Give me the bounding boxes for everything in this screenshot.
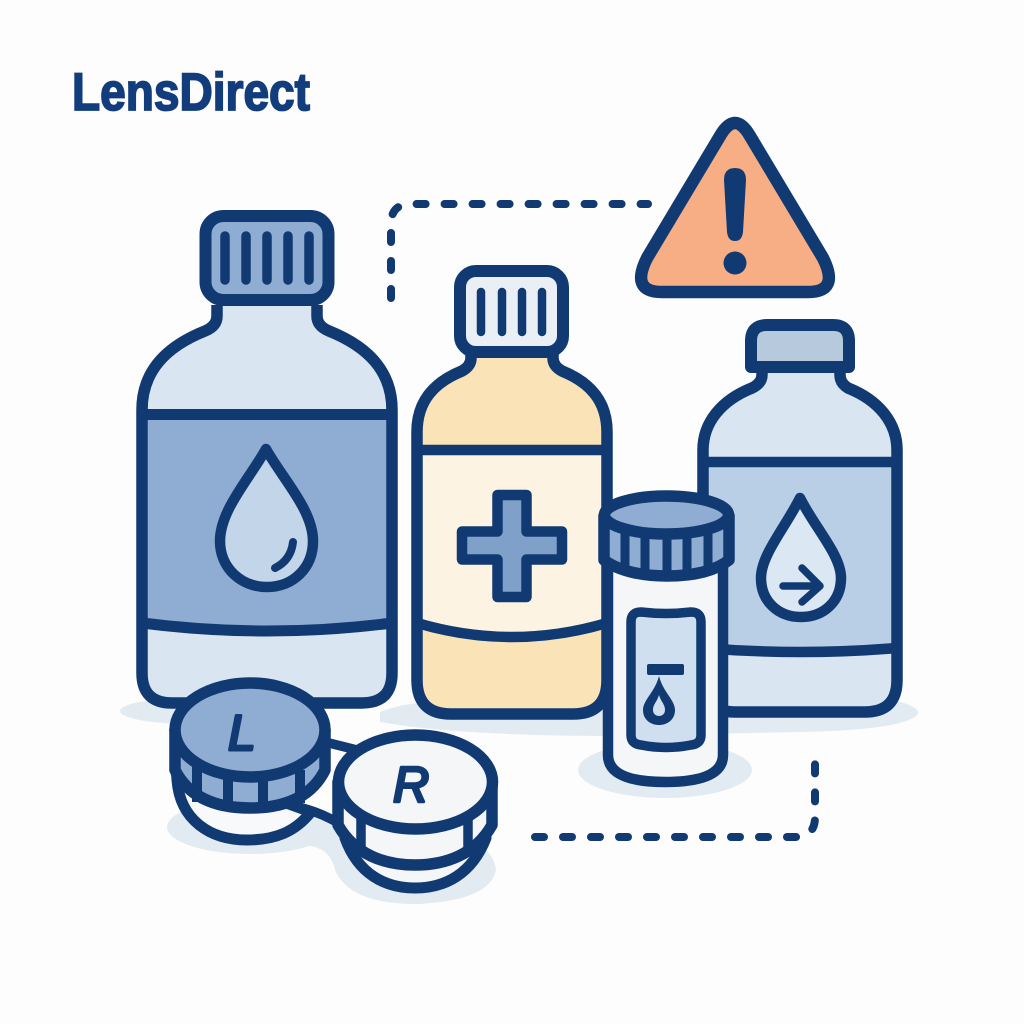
warning triangle icon: [641, 123, 829, 292]
logo: LensDirect: LensDirect: [72, 63, 310, 122]
jar lid: [604, 496, 729, 576]
lens case: [175, 683, 492, 888]
dashed connector: bottom: [535, 755, 815, 837]
right lens cup: [338, 735, 492, 888]
left lens cup: [175, 683, 325, 840]
medical cross icon: [462, 495, 562, 597]
bottle cap: [460, 271, 563, 352]
ground shadows: [120, 698, 918, 904]
light blue bottle: [703, 325, 897, 712]
left lens cup: L: [228, 705, 256, 761]
large blue bottle: [142, 216, 392, 703]
jar label: [631, 612, 701, 748]
cream bottle: [417, 271, 607, 714]
bottle cap: [751, 325, 849, 367]
case connector: [285, 742, 365, 827]
bottle cap: [206, 216, 328, 300]
water drop icon: [220, 449, 313, 587]
dashed connector: top: [391, 204, 648, 298]
drop with arrow icon: [761, 498, 841, 617]
small jar: [604, 496, 729, 782]
right lens cup: R: [393, 757, 429, 813]
